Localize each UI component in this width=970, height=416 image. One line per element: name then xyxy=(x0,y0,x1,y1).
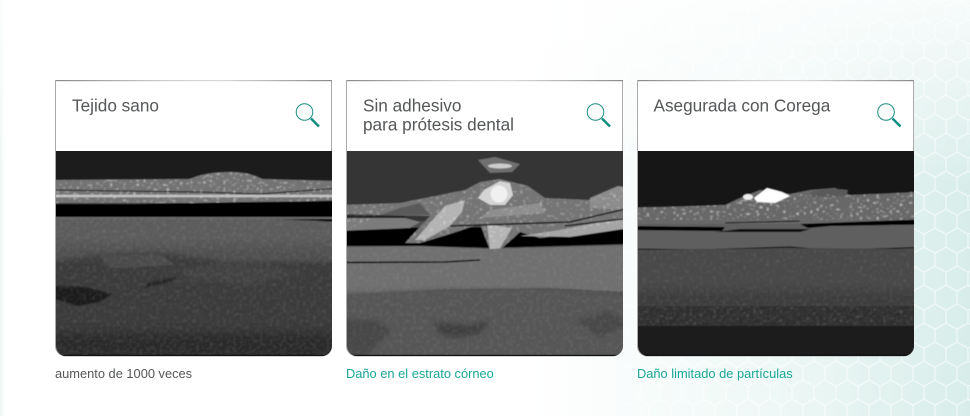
card frame xyxy=(346,80,622,356)
heading: Asegurada con Corega xyxy=(654,96,831,116)
caption: Daño en el estrato córneo xyxy=(346,366,494,381)
card frame xyxy=(638,80,914,356)
subheading: para prótesis dental xyxy=(363,114,514,134)
black gap xyxy=(340,226,630,248)
icon: magnifier xyxy=(587,104,610,126)
icon: magnifier xyxy=(878,104,900,126)
lower tissue xyxy=(340,245,630,295)
top edge xyxy=(347,80,623,81)
caption: Daño limitado de partículas xyxy=(637,366,793,381)
floating particle xyxy=(478,157,520,173)
panel: sin adhesivo xyxy=(340,80,630,381)
micrograph: healthy tissue xyxy=(50,145,340,360)
lower tissue xyxy=(630,224,920,250)
bright particle xyxy=(754,188,790,203)
detached flakes xyxy=(340,179,630,250)
panel: asegurada con corega xyxy=(630,80,920,381)
card frame xyxy=(56,80,332,356)
bright nucleus xyxy=(478,181,513,205)
tissue band xyxy=(630,188,920,226)
heading: Sin adhesivo xyxy=(363,96,461,116)
top edge xyxy=(638,80,914,81)
icon: magnifier xyxy=(296,104,319,126)
top edge xyxy=(56,80,332,81)
caption: aumento de 1000 veces xyxy=(55,366,192,381)
micrograph: damaged tissue xyxy=(340,145,630,360)
panel: tejido sano xyxy=(50,80,340,381)
micrograph: protected tissue xyxy=(630,145,920,360)
heading: Tejido sano xyxy=(72,96,159,116)
